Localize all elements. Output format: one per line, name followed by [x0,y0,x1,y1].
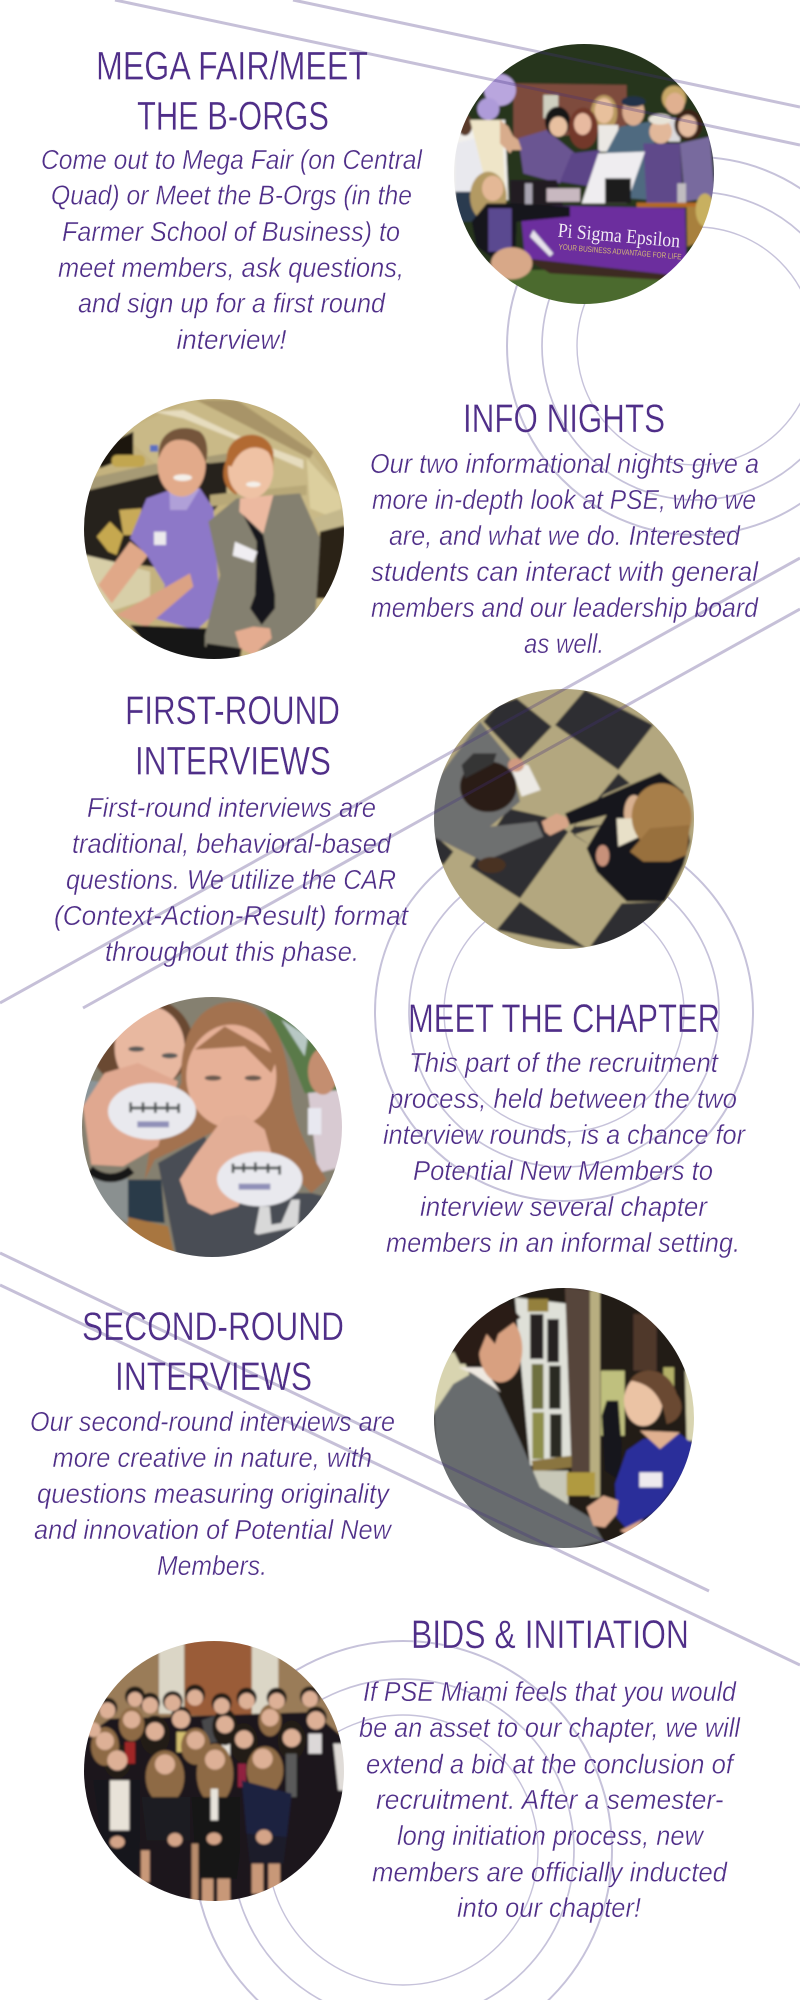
text: Info Nights description: are, and what we do. Interested [389,520,742,551]
text: First-Round description: (Context-Action-Result) format [54,900,409,931]
photo: handshake on checkered floor [434,689,694,949]
text: Mega Fair description: and sign up for a first round [78,288,387,318]
text: Info Nights description: students can interact with general [371,556,759,587]
panel: Second-Round Interviews [30,1277,707,1581]
text: Bids & Initiation description: into our chapter! [457,1892,641,1923]
text: First-Round description [54,792,409,967]
photo: chapter group portrait [84,1641,344,1901]
text: Meet the Chapter description: Potential New Members to [413,1155,713,1186]
concentric rings: middle [375,823,753,1201]
text: Bids & Initiation description: If PSE Miami feels that you would [363,1676,738,1707]
text: First-Round description: questions. We utilize the CAR [66,864,396,895]
heading: Info Nights: INFO NIGHTS [463,397,665,441]
photo: interview conversation [434,1288,694,1548]
heading: Bids & Initiation: BIDS & INITIATION [411,1613,689,1657]
text: Bids & Initiation description [359,1676,741,1923]
panel: Info Nights [73,388,760,672]
heading: First-Round Interviews [125,689,340,784]
panel: Bids & Initiation [73,1613,741,1923]
text: Meet the Chapter description: interview rounds, is a chance for [383,1119,747,1150]
text: Second-Round description: Our second-round interviews are [30,1406,395,1437]
text: Meet the Chapter description: This part of the recruitment [409,1047,719,1078]
text: Mega Fair description: Farmer School of Business) to [62,216,400,247]
panel: First-Round Interviews [54,678,707,967]
text: Info Nights description: more in-depth look at PSE, who we [372,484,756,515]
heading: Second-Round Interviews: SECOND-ROUND [82,1305,344,1349]
photo: Pi Sigma Epsilon booth [454,44,714,304]
text: Info Nights description [370,448,760,659]
text: First-Round description: First-round interviews are [87,792,376,823]
panel: Mega Fair [41,33,727,355]
text: First-Round description: throughout this phase. [105,936,359,967]
text: Mega Fair description: interview! [176,324,287,355]
panel: Meet the Chapter [71,986,747,1270]
photo: members holding mini footballs [82,997,342,1257]
text: Bids & Initiation description: members are officially inducted [372,1856,729,1888]
text: Second-Round description: Members. [157,1550,267,1581]
heading: First-Round Interviews: INTERVIEWS [135,740,331,784]
heading: Meet the Chapter: MEET THE CHAPTER [408,997,720,1041]
text: Bids & Initiation description: be an asset to our chapter, we will [359,1712,741,1743]
heading: Second-Round Interviews: INTERVIEWS [115,1355,312,1399]
heading: Mega Fair: MEGA FAIR/MEET [96,44,368,88]
heading: Mega Fair: THE B-ORGS [137,94,329,138]
text: Bids & Initiation description: recruitment. After a semester- [376,1784,724,1815]
text: Second-Round description: more creative in nature, with [52,1442,372,1473]
text: First-Round description: traditional, behavioral-based [72,828,393,859]
text: Info Nights description: as well. [524,628,604,659]
text: Bids & Initiation description: extend a bid at the conclusion of [366,1748,736,1780]
text: Mega Fair description: meet members, ask questions, [58,252,404,283]
text: Second-Round description: questions measuring originality [37,1478,391,1509]
text: Mega Fair description: Come out to Mega Fair (on Central [41,144,423,175]
text: Mega Fair description [41,144,423,355]
text: Info Nights description: Our two informational nights give a [370,448,759,479]
photo: Pi Sigma Epsilon booth: YOUR BUSINESS ADVANTAGE FOR LIFE [558,242,682,261]
text: Second-Round description [30,1406,395,1581]
heading: Second-Round Interviews [82,1305,344,1399]
text: Meet the Chapter description: members in an informal setting. [386,1227,740,1258]
photo: Pi Sigma Epsilon booth: Pi Sigma Epsilon [557,220,681,252]
text: Meet the Chapter description: interview several chapter [420,1191,709,1222]
text: Info Nights description: members and our leadership board [371,592,760,623]
text: Meet the Chapter description [383,1047,747,1258]
heading: Mega Fair [96,44,368,138]
photo: two members smiling [84,399,344,659]
heading: First-Round Interviews: FIRST-ROUND [125,689,340,733]
text: Second-Round description: and innovation of Potential New [34,1514,393,1545]
text: Mega Fair description: Quad) or Meet the B-Orgs (in the [51,180,412,210]
concentric rings: bottom [194,1641,612,2000]
concentric rings: top right [507,157,800,535]
text: Meet the Chapter description: process, held between the two [388,1083,737,1114]
text: Bids & Initiation description: long initiation process, new [397,1820,705,1851]
